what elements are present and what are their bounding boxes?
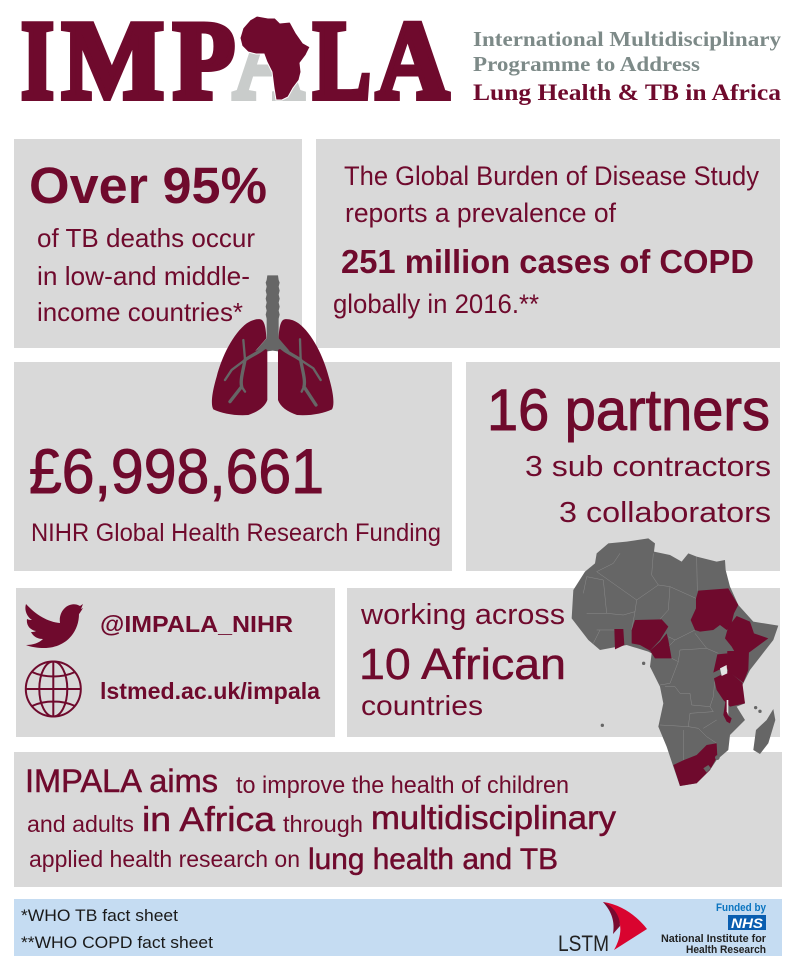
icon: globe <box>26 662 81 716</box>
wordmark: A <box>233 0 304 123</box>
logo: NIHR funded by: National Institute for <box>661 933 767 945</box>
website: lstmed.ac.uk/impala <box>100 678 320 704</box>
bronchi <box>225 339 321 405</box>
figure: 16 partners: 16 partners <box>487 378 770 443</box>
text: globally in 2016: globally in 2016.** <box>333 289 539 319</box>
wordmark <box>21 0 449 123</box>
wordmark: I <box>21 0 54 123</box>
header tagline: Programme to Address <box>473 52 700 76</box>
logo: LSTM: LSTM <box>558 931 609 956</box>
text: references: *WHO TB fact sheet <box>21 906 178 925</box>
text: aims statement: IMPALA aims <box>25 763 218 799</box>
logo: NIHR funded by: Funded by <box>716 902 767 914</box>
text: aims statement: lung health and TB <box>308 843 558 876</box>
panel: COPD prevalence <box>316 139 780 348</box>
trachea <box>253 275 293 353</box>
borders <box>583 553 718 760</box>
text: TB deaths description: in low-and middle- <box>37 261 250 291</box>
text: study intro: The Global Burden of Disease Study <box>344 161 759 191</box>
panel: aims <box>14 752 782 887</box>
figure: 10 African: 10 African <box>359 640 566 689</box>
icon: Africa silhouette in logo <box>240 16 310 100</box>
highlighted countries <box>614 588 768 786</box>
header tagline <box>473 27 782 105</box>
panel: TB deaths <box>14 139 302 348</box>
wordmark: L <box>313 0 371 123</box>
text: working across: working across <box>360 599 565 631</box>
panel: African countries <box>347 588 780 737</box>
text: sub contractors: 3 sub contractors <box>525 451 771 483</box>
left lung <box>212 319 267 415</box>
figure: funding amount: £6,998,661 <box>29 437 324 507</box>
text: countries: countries <box>361 690 483 721</box>
text: collaborators: 3 collaborators <box>559 497 771 529</box>
text: references <box>21 906 213 952</box>
text: TB deaths description <box>37 223 255 327</box>
map: Africa with highlighted countries <box>572 538 778 786</box>
text: TB deaths description: income countries* <box>37 297 243 327</box>
text: funding source: NIHR Global Health Research Funding <box>31 519 441 547</box>
text: aims statement: applied health research on <box>29 846 300 872</box>
headline: 251 million cases: 251 million cases of COPD <box>341 243 754 280</box>
lake and enclaves <box>703 665 728 773</box>
text: aims statement: through <box>283 811 363 837</box>
icon: lungs <box>212 275 333 415</box>
icon: twitter bird <box>25 604 83 648</box>
panel: footer <box>14 899 782 956</box>
logo: NIHR funded by: Health Research <box>686 944 766 956</box>
header logo: IMPALA <box>21 0 449 123</box>
wordmark: P <box>173 0 235 123</box>
text: aims statement: to improve the health of children <box>236 772 569 799</box>
panel: contact links <box>16 588 335 737</box>
text: aims statement <box>25 763 617 876</box>
text: aims statement: and adults <box>27 811 134 837</box>
header tagline: Lung Health & TB in Africa <box>473 80 782 105</box>
wordmark: A <box>376 0 449 123</box>
islands <box>601 662 775 754</box>
right lung <box>278 319 333 415</box>
mainland <box>572 538 778 786</box>
panel: partners <box>466 362 780 571</box>
headline: Over 95%: Over 95% <box>29 157 267 214</box>
logo: LSTM <box>558 902 647 956</box>
logo: NIHR funded by <box>661 902 767 956</box>
header tagline: International Multidisciplinary <box>473 27 782 51</box>
text: TB deaths description: of TB deaths occur <box>37 223 255 253</box>
text: study intro: reports a prevalence of <box>345 198 616 228</box>
wordmark: M <box>62 0 164 123</box>
text: references: **WHO COPD fact sheet <box>21 933 213 952</box>
logo: NIHR funded by: NHS <box>731 915 764 931</box>
handle: @IMPALA_NIHR <box>100 611 293 637</box>
panel: funding <box>14 362 452 571</box>
text: study intro <box>344 161 759 228</box>
text: aims statement: in Africa <box>142 801 275 839</box>
text: aims statement: multidisciplinary <box>371 799 617 836</box>
